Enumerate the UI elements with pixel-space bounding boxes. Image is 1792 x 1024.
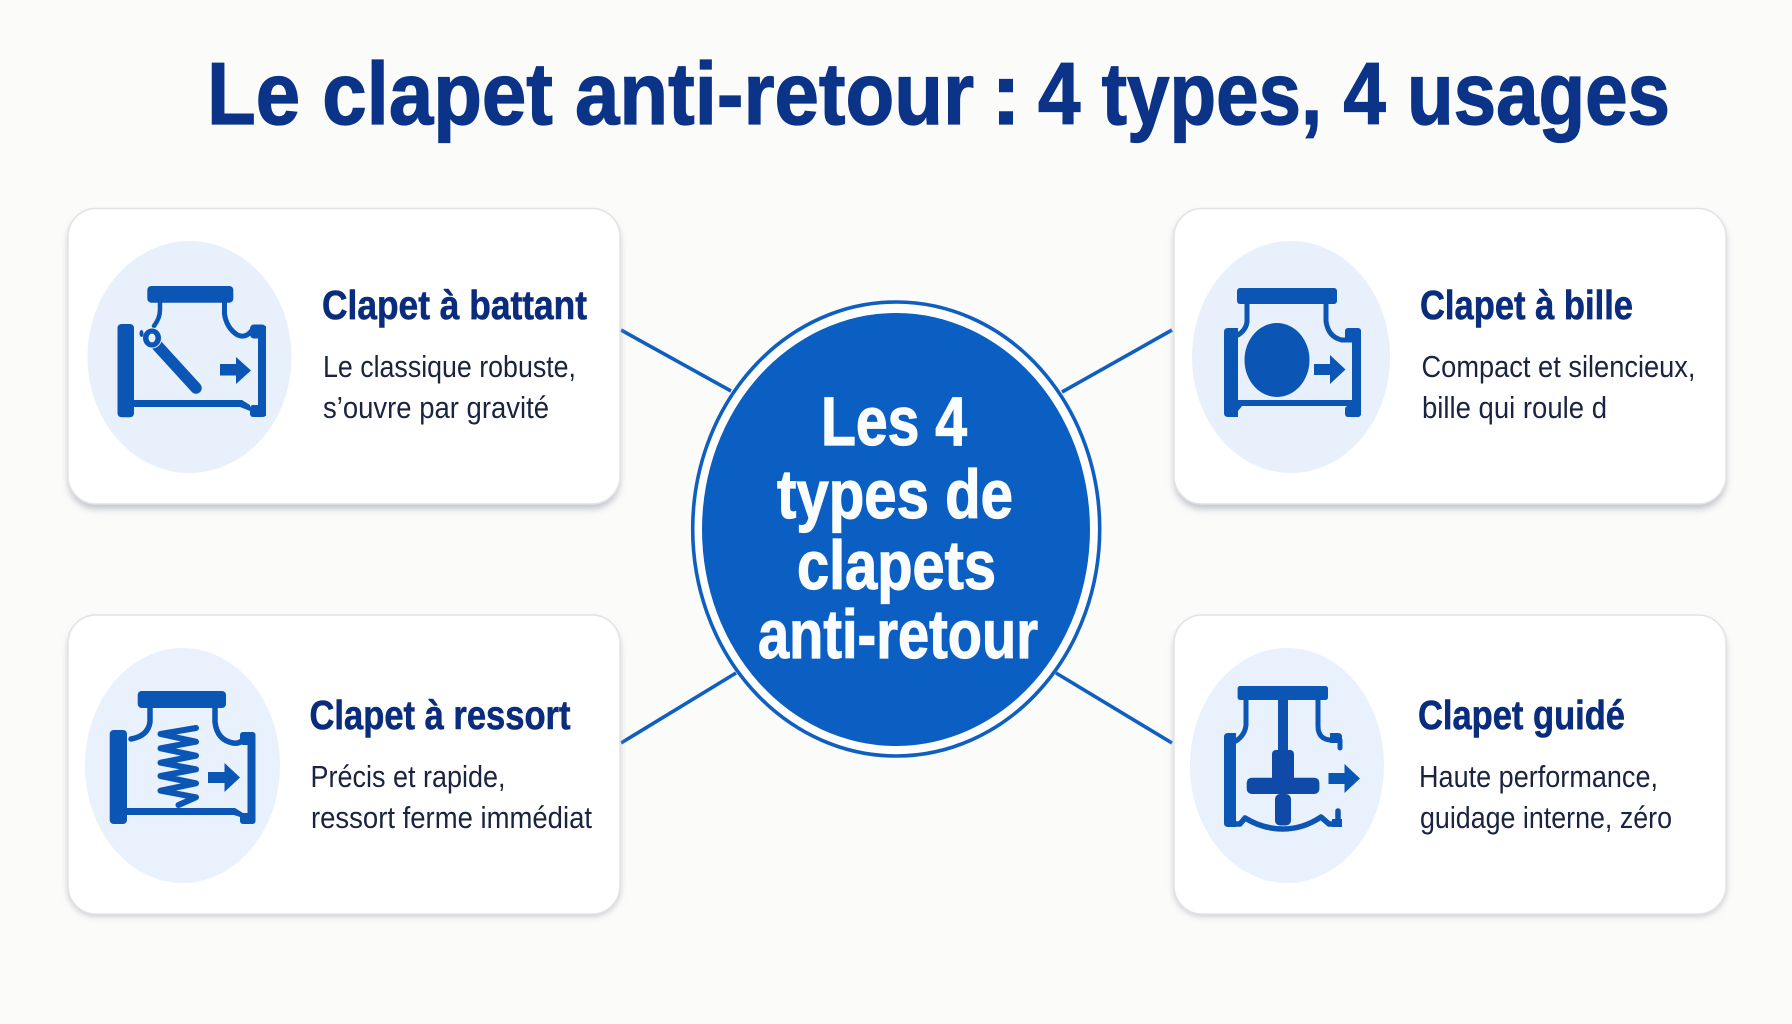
panel: clapet à battant [68, 208, 620, 509]
hub text: types de [777, 456, 1013, 533]
card heading: Clapet à battant [322, 282, 587, 328]
card heading: Clapet à ressort [310, 692, 571, 738]
icon: swing check valve [118, 286, 266, 417]
hub text [758, 383, 1038, 673]
panel: clapet guidé [1174, 615, 1726, 916]
description: Précis et rapide, [310, 759, 506, 794]
description: s’ouvre par gravité [323, 390, 549, 425]
description [310, 759, 592, 835]
description: ressort ferme immédiat [311, 800, 592, 835]
central hub circle [693, 302, 1100, 756]
description: Haute performance, [1419, 759, 1658, 794]
description [1419, 759, 1672, 835]
card heading: Clapet guidé [1418, 692, 1625, 738]
connector lines [621, 330, 1172, 743]
hub text: clapets [797, 527, 996, 604]
icon background: guidé [1190, 648, 1384, 883]
panel: clapet à ressort [68, 615, 620, 916]
description [323, 349, 576, 425]
title [207, 44, 1670, 143]
icon background: bille [1192, 241, 1390, 473]
title: : [991, 44, 1021, 143]
title: 4 types, 4 usages [1038, 44, 1670, 143]
hub text: anti-retour [758, 596, 1038, 673]
icon: guided check valve [1224, 686, 1360, 829]
icon: spring check valve [110, 691, 256, 824]
panel: clapet à bille [1174, 208, 1726, 509]
hub text: Les 4 [821, 383, 967, 460]
card heading: Clapet à bille [1420, 282, 1633, 328]
description: Le classique robuste, [323, 349, 576, 384]
title: Le clapet anti-retour [207, 44, 974, 143]
icon: ball check valve [1224, 288, 1361, 417]
description: bille qui roule d [1422, 390, 1607, 425]
icon background: ressort [85, 648, 280, 883]
icon background: battant [88, 241, 292, 473]
description: Compact et silencieux, [1422, 349, 1696, 384]
description [1422, 349, 1696, 425]
description: guidage interne, zéro [1420, 800, 1672, 835]
